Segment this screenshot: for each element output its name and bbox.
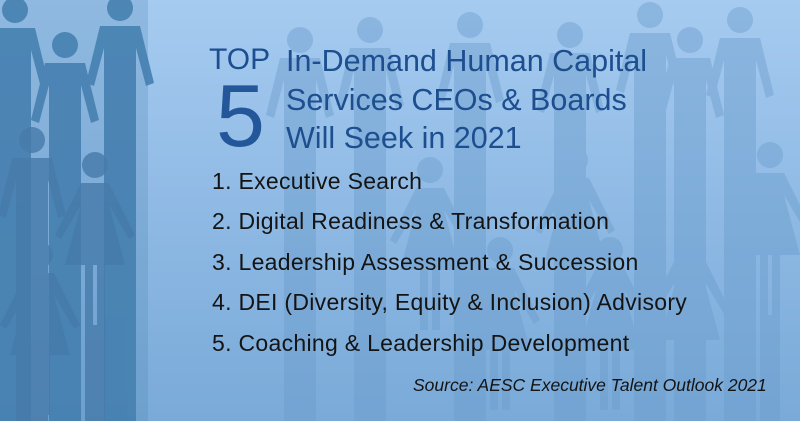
title: big 5: 5 [216,66,265,165]
title: heading: Will Seek in 2021 [286,121,522,155]
title: heading [286,44,647,155]
title: heading: In-Demand Human Capital [286,44,647,78]
title: TOP: TOP [209,43,270,76]
item 2: 2. Digital Readiness & Transformation [212,208,609,234]
item 4: 4. DEI (Diversity, Equity & Inclusion) Advisory [212,289,687,315]
source: Source: AESC Executive Talent Outlook 2021 [413,375,767,395]
item 5: 5. Coaching & Leadership Development [212,330,629,356]
list [212,168,687,356]
item 1: 1. Executive Search [212,168,422,194]
title: heading: Services CEOs & Boards [286,82,627,116]
item 3: 3. Leadership Assessment & Succession [212,249,639,275]
